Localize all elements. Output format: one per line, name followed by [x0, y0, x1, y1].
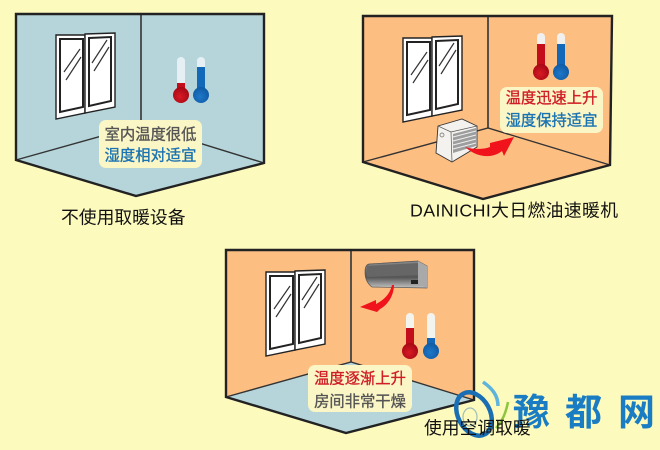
panel: air conditioner room [226, 250, 474, 433]
icon: air conditioner [365, 261, 427, 288]
watermark logo [449, 382, 655, 442]
callout: 温度逐渐上升 [314, 370, 406, 388]
callout: 室内温度很低 [105, 126, 196, 144]
arrow: warm air [465, 137, 514, 156]
room walls and floor [16, 14, 264, 196]
callout [500, 87, 603, 133]
icon: oil heater [436, 119, 477, 162]
icon: thermometers [533, 33, 569, 80]
callout: 湿度保持适宜 [506, 112, 597, 130]
callout [99, 120, 202, 168]
caption: DAINICHI大日燃油速暖机 [410, 200, 618, 220]
logo text: 豫 [513, 392, 550, 433]
icon: logo swirl [449, 382, 508, 442]
caption: air conditioner room: 使用空调取暖 [424, 418, 531, 438]
callout [308, 365, 412, 412]
icon: thermometers [402, 313, 439, 359]
caption: 不使用取暖设备 [61, 208, 186, 228]
icon: thermometers [173, 57, 209, 103]
panel: no heating room [16, 14, 264, 228]
room walls and floor [226, 250, 474, 433]
callout: 湿度相对适宜 [105, 148, 196, 164]
room walls and floor [363, 16, 612, 199]
icon: window [56, 33, 115, 119]
callout: 温度迅速上升 [506, 90, 597, 107]
callout: 房间非常干燥 [314, 394, 406, 410]
logo text: 都 [565, 392, 602, 433]
panel: DAINICHI heater room [363, 16, 618, 220]
icon: window [403, 36, 462, 122]
icon: window [266, 270, 325, 356]
logo text: 网 [618, 392, 655, 433]
arrow: air flow [360, 285, 394, 312]
